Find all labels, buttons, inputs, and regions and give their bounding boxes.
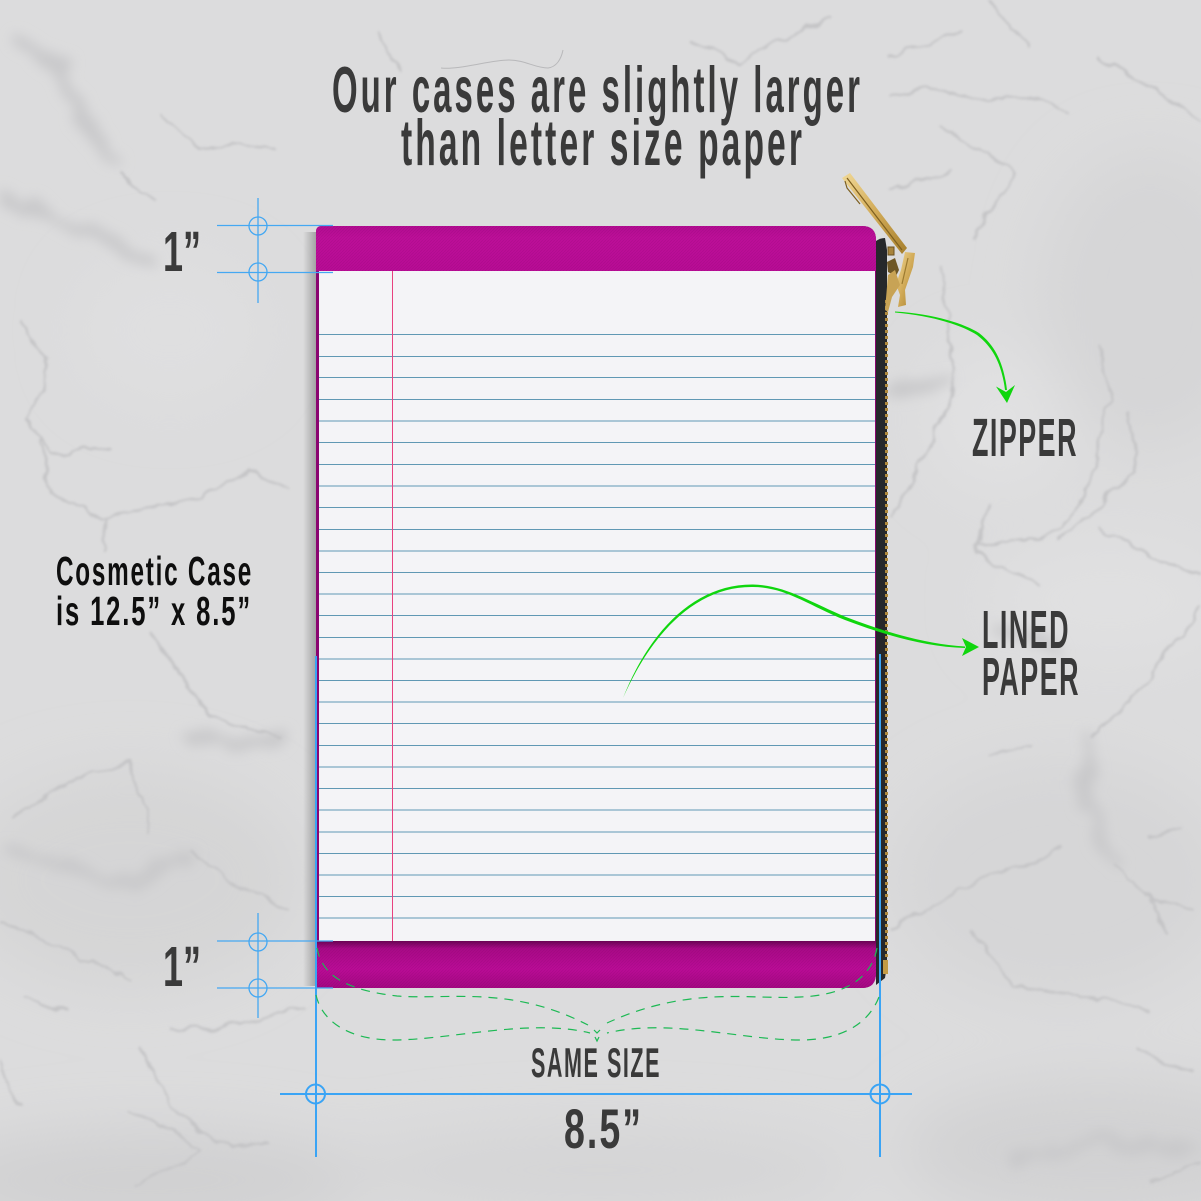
top fold [316,226,876,271]
title: than letter size paper [401,106,805,179]
label: cosmetic case size [56,548,253,634]
title [332,53,863,179]
label: same size: SAME SIZE [531,1039,661,1086]
zipper tape [876,238,888,985]
blue measure: width [280,654,912,1157]
arrow: zipper [895,312,1015,403]
bottom fold [316,941,876,988]
arrow: lined paper [623,584,979,698]
cosmetic case [303,226,888,988]
text: PAPER [982,647,1080,707]
label: lined paper: LINED [982,600,1070,660]
label: lined paper [982,600,1080,707]
label: top 1 inch: 1” [163,220,201,284]
blue measure: top 1 inch [217,198,333,303]
text: ZIPPER [972,408,1078,468]
lined paper [319,271,875,941]
label: bottom 1 inch: 1” [163,935,201,999]
label: cosmetic case size: is 12.5” x 8.5” [56,588,252,634]
zipper pull [842,173,915,312]
case fabric [316,226,876,988]
label: 8.5 inches: 8.5” [564,1097,643,1160]
green dashed brace [316,948,879,1041]
label: cosmetic case size: Cosmetic Case [56,548,253,594]
blue measure: bottom 1 inch [217,913,333,1018]
